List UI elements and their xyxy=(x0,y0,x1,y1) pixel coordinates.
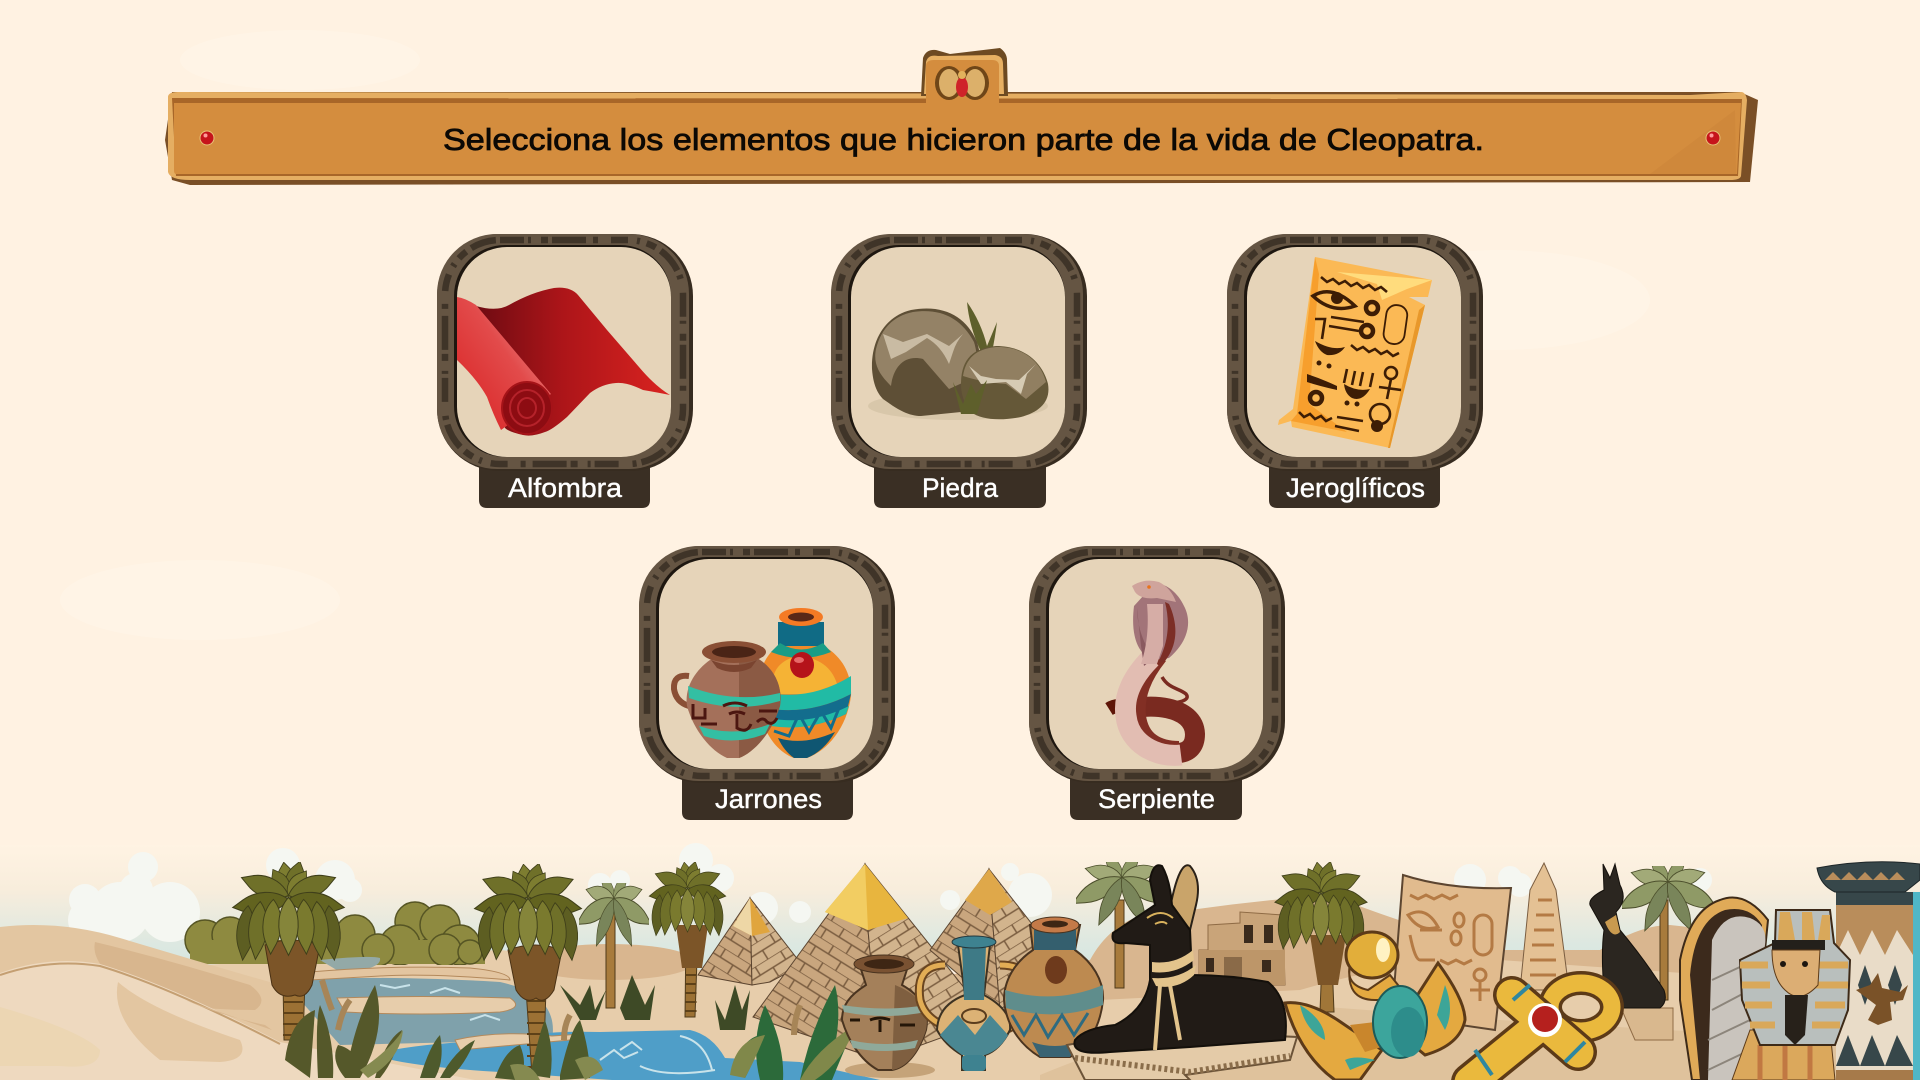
third pyramid xyxy=(930,869,1060,1010)
card: Serpiente xyxy=(1029,546,1285,820)
card frame xyxy=(639,546,895,783)
brown jar xyxy=(674,641,781,758)
icon: rocks xyxy=(868,302,1048,420)
anubis statue xyxy=(1074,865,1286,1053)
black cat statue xyxy=(1590,864,1673,1040)
large painted jar xyxy=(1004,917,1103,1057)
striped vase with handles xyxy=(919,936,1034,1071)
card label Piedra xyxy=(874,465,1046,508)
palm trees left xyxy=(231,859,727,1075)
palm 3 slim xyxy=(573,871,655,1008)
title banner xyxy=(165,48,1758,185)
brown hieroglyph jar xyxy=(842,955,935,1078)
banner plank xyxy=(165,92,1758,185)
sky band xyxy=(0,845,1920,970)
big pyramid xyxy=(753,864,990,1060)
river sand islands xyxy=(337,996,516,1014)
palm 1 xyxy=(231,859,346,1040)
pedestal xyxy=(1067,1030,1297,1080)
icon: cobra xyxy=(1109,581,1195,755)
scarab with gold wings xyxy=(1285,932,1465,1080)
small pyramid xyxy=(698,898,802,985)
card label Jarrones xyxy=(682,777,853,820)
card frame xyxy=(1227,234,1483,471)
card label Alfombra xyxy=(479,465,650,508)
palm center xyxy=(1274,859,1368,1012)
mummy case xyxy=(1680,898,1770,1080)
card label Serpiente: Serpiente xyxy=(1098,784,1215,814)
ankh xyxy=(1470,983,1612,1080)
pharaoh sarcophagus xyxy=(1732,910,1850,1080)
reeds xyxy=(285,975,855,1080)
icon: papyrus with hieroglyphs xyxy=(1278,257,1432,448)
card frame xyxy=(831,234,1087,471)
orange jar xyxy=(757,608,851,758)
banner title text: Selecciona los elementos que hicieron parte de la vida de Cleopatra. xyxy=(443,122,1484,157)
card label Jeroglificos: Jeroglíficos xyxy=(1286,473,1425,503)
palm 4 xyxy=(648,860,727,1017)
river xyxy=(300,978,553,1045)
banner top tab with scarab xyxy=(921,48,1008,104)
card label Alfombra: Alfombra xyxy=(508,473,623,503)
card frame xyxy=(437,234,693,471)
card: Alfombra xyxy=(437,234,693,508)
card: Jarrones xyxy=(639,546,895,820)
card label Piedra: Piedra xyxy=(922,473,999,503)
papyrus scroll xyxy=(1392,875,1511,1030)
palm behind anubis xyxy=(1068,850,1176,988)
card frame xyxy=(1029,546,1285,783)
right gem xyxy=(1706,130,1720,146)
bushes xyxy=(185,902,485,966)
column xyxy=(1817,862,1920,1080)
card label Jarrones: Jarrones xyxy=(715,784,822,814)
left gem xyxy=(200,130,214,146)
mud brick house xyxy=(1199,912,1285,985)
pyramids xyxy=(698,864,1060,1060)
palm 2 xyxy=(473,861,583,1075)
card: Jeroglificos xyxy=(1227,234,1483,508)
left dunes xyxy=(0,925,475,1080)
sand bank near river xyxy=(300,965,860,1080)
card label Jeroglificos xyxy=(1269,465,1440,508)
obelisk xyxy=(1520,863,1569,990)
card label Serpiente xyxy=(1070,777,1242,820)
far hills xyxy=(700,895,1920,1080)
card: Piedra xyxy=(831,234,1087,508)
ground xyxy=(200,950,1920,1080)
clouds xyxy=(68,843,1712,942)
icon: two decorated jars xyxy=(674,608,851,758)
oasis pond xyxy=(392,1030,880,1080)
icon: red carpet xyxy=(457,288,670,436)
right palm xyxy=(1614,854,1722,1000)
bottom scene: Egyptian desert landscape xyxy=(0,843,1920,1080)
